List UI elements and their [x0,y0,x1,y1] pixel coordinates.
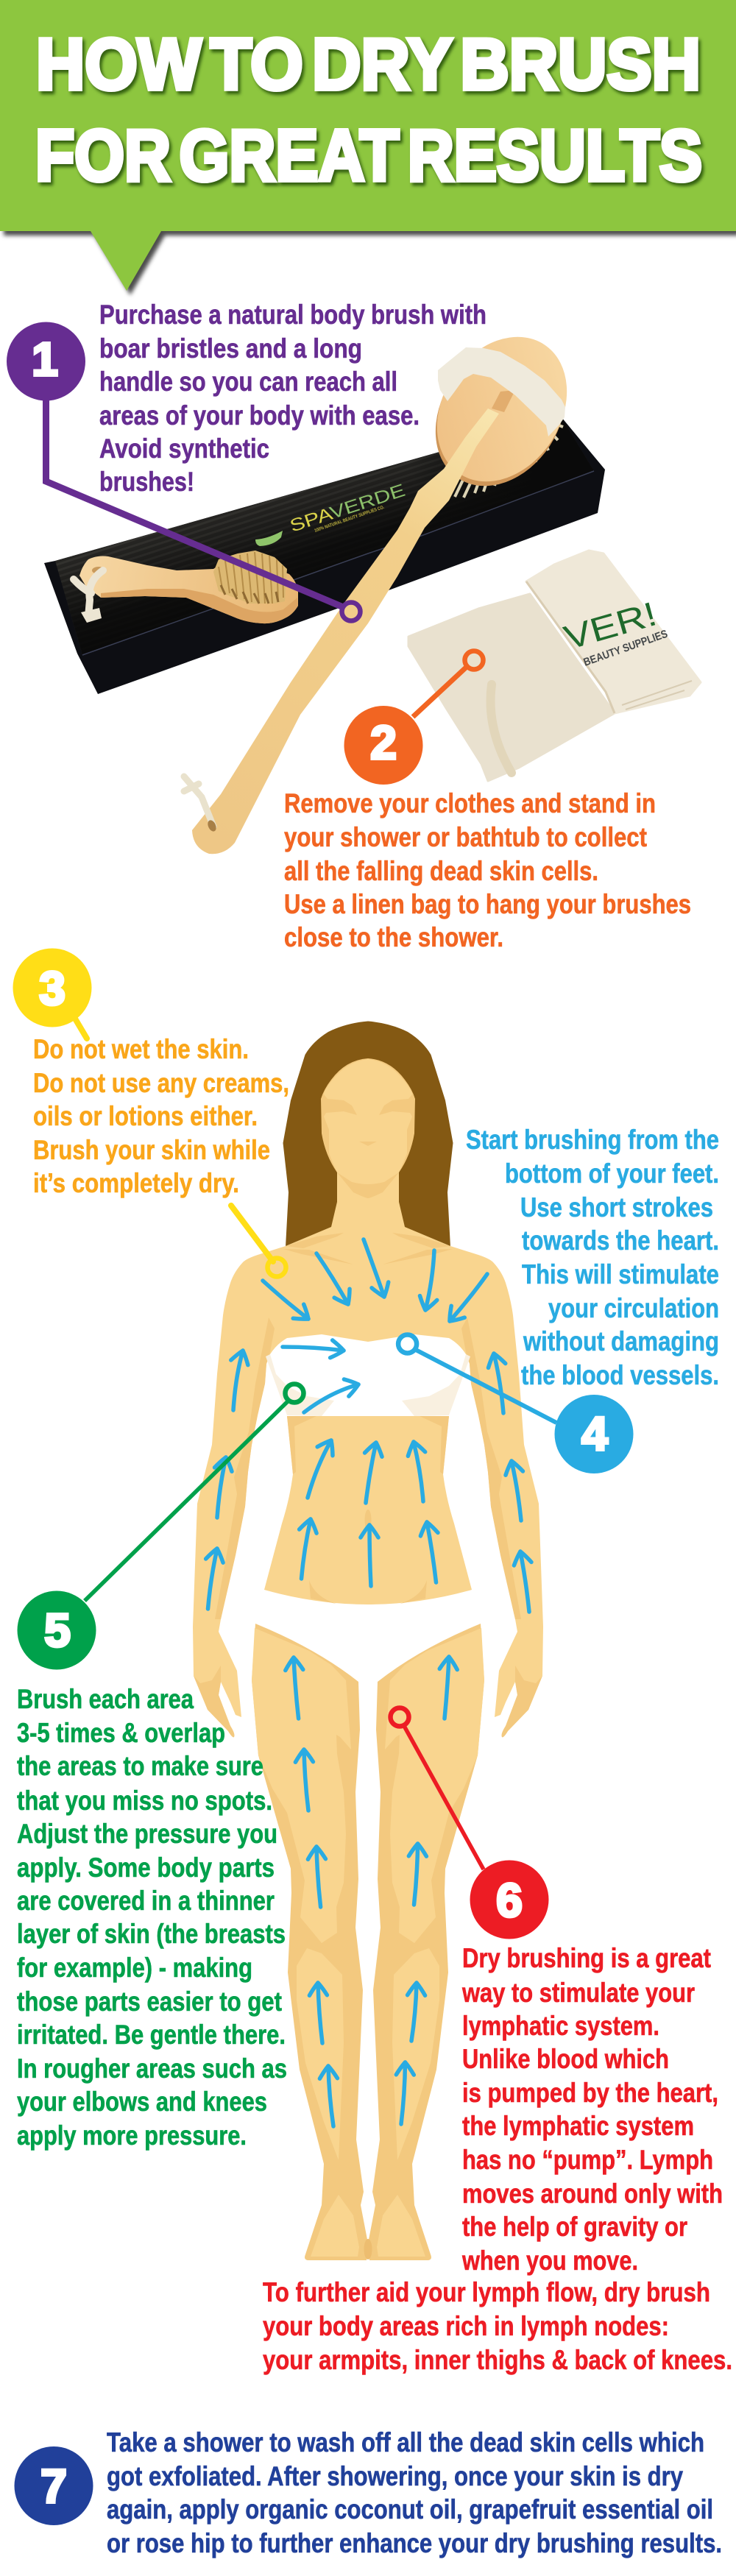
badge 3: 3 [39,962,66,1015]
text 2: close to the shower. [284,922,503,952]
text 2 [284,788,691,952]
direction arrows [208,1239,529,2126]
text 5: In rougher areas such as [17,2053,287,2084]
product photo: black box [44,417,605,694]
step 5 [17,1384,303,2151]
brush head [411,312,593,506]
body left half [193,1148,368,2260]
badge 2 [344,706,422,785]
text 1: handle so you can reach all [99,367,397,397]
text 5: Adjust the pressure you [17,1819,277,1849]
strap [438,347,565,436]
title text [35,24,702,196]
text 2: Remove your clothes and stand in [284,788,656,818]
badge 6: 6 [496,1874,523,1927]
box logo: SPAVERDE [288,481,408,537]
text 5: are covered in a thinner [17,1886,275,1916]
text 6: lymphatic system. [462,2011,659,2041]
bag logo: VER! [559,594,661,657]
badge 4 [555,1395,633,1473]
badge 4: 4 [581,1407,608,1460]
badge 5 [18,1591,96,1669]
text 5: for example) - making [17,1953,252,1983]
step 3 [13,948,289,1276]
ankle overlap [364,2239,372,2260]
connector line 6 [404,1726,484,1869]
bristles [455,423,563,498]
text 5: irritated. Be gentle there. [17,2020,286,2050]
text 3: oils or lotions either. [33,1101,258,1131]
badge 7 [15,2446,93,2525]
handle [192,408,499,854]
product photo: small face brush [74,551,298,623]
product photo: long-handled body brush [184,312,593,854]
badge 3 [13,948,91,1027]
text 5: your elbows and knees [17,2087,267,2117]
bag logo: BEAUTY SUPPLIES [582,628,669,669]
badge 7: 7 [40,2460,67,2513]
product photo: linen bag [408,551,701,781]
text 5: 3-5 times & overlap [17,1718,225,1748]
box logo: 100% NATURAL BEAUTY SUPPLIES CO. [314,505,385,534]
title banner [0,0,736,291]
text 5: layer of skin (the breasts [17,1919,286,1949]
badge 1 [7,322,85,400]
text 5 [17,1684,287,2151]
text 5: Brush each area [17,1684,194,1714]
text 1: areas of your body with ease. [99,400,420,431]
connector line 1 [46,390,342,606]
text 6 [263,1943,732,2375]
text 6: way to stimulate your [461,1978,695,2008]
step 7 [15,2427,722,2558]
text 3: Do not use any creams, [33,1068,289,1098]
text 1: Avoid synthetic [99,434,269,464]
connector line 2 [413,667,467,717]
text 2: all the falling dead skin cells. [284,856,598,886]
text 6: when you move. [461,2246,638,2276]
text 6: Unlike blood which [462,2044,669,2074]
text 3: it’s completely dry. [33,1168,239,1198]
connector line 5 [85,1401,288,1601]
text 3 [33,1034,289,1198]
text 6: your body areas rich in lymph nodes: [263,2311,669,2341]
text 5: those parts easier to get [17,1986,282,2017]
badge 1: 1 [32,333,58,386]
text 1: brushes! [99,467,194,497]
rope [184,776,213,827]
badge 5: 5 [44,1604,71,1657]
step 1 [7,300,486,621]
text 7 [107,2427,722,2558]
text 1: Purchase a natural body brush with [99,300,486,330]
text 6: the lymphatic system [462,2111,694,2141]
text 1: boar bristles and a long [99,333,362,364]
text 5: that you miss no spots. [17,1786,272,1816]
text 5: apply more pressure. [17,2120,247,2151]
step 2 [284,651,691,952]
woman figure [193,1022,543,2260]
text 5: apply. Some body parts [17,1853,275,1883]
text 6: the help of gravity or [462,2212,687,2242]
connector line 3 [75,1019,273,1262]
badge 6 [470,1861,549,1939]
face [321,1058,415,1198]
body right half [368,1148,543,2260]
banner speech bubble [0,0,736,291]
brush head edge [409,316,592,511]
bag logo [559,594,669,669]
connector line 4 [414,1349,556,1423]
step 6 [263,1708,732,2375]
text 3: Do not wet the skin. [33,1034,249,1064]
title text: HOW TO DRY BRUSH [36,24,701,105]
navel [365,1510,371,1530]
text 5: the areas to make sure [17,1751,263,1781]
badge 2: 2 [370,716,397,769]
text 4 [466,1125,719,1390]
step 4 [398,1125,719,1473]
hair [283,1022,453,1247]
slot [492,390,515,412]
box logo [255,481,408,546]
text 3: Brush your skin while [33,1135,270,1165]
text 1 [99,300,486,497]
text 2: your shower or bathtub to collect [284,822,647,852]
